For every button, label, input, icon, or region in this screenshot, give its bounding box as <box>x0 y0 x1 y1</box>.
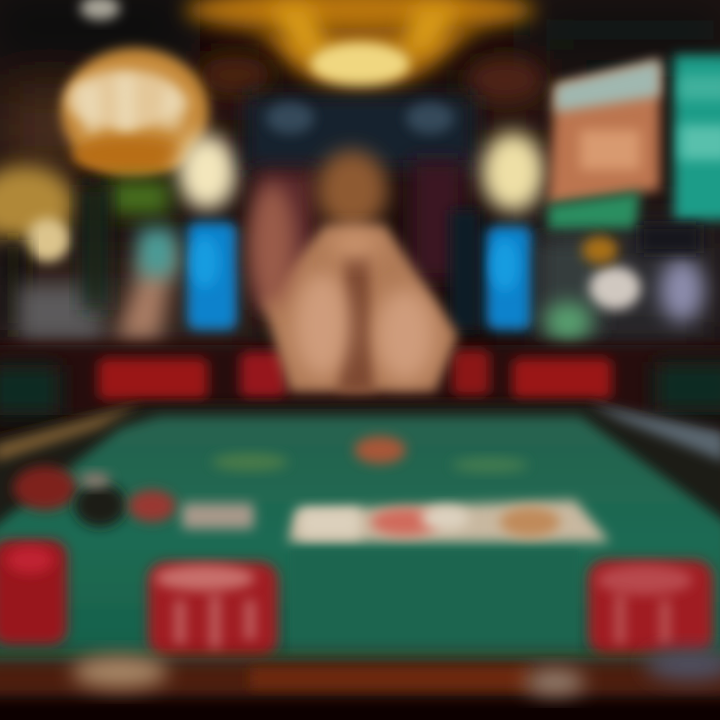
right lights and screens <box>481 55 720 230</box>
collar <box>330 229 380 261</box>
red seats <box>0 345 720 415</box>
front wooden rail <box>0 649 720 720</box>
left stack <box>0 540 67 645</box>
left chest <box>294 273 350 377</box>
right crowd <box>540 225 704 342</box>
cards row <box>288 500 610 542</box>
head <box>316 150 388 230</box>
ceiling chandelier <box>80 0 543 102</box>
left rail <box>0 404 140 462</box>
poker table <box>0 402 720 690</box>
right stack <box>588 560 713 655</box>
left crowd <box>0 185 176 340</box>
chandelier canopy <box>185 0 535 34</box>
right rail <box>590 404 720 462</box>
blue panels <box>187 222 532 330</box>
felt surface <box>0 416 720 670</box>
chandelier bowl <box>255 25 480 92</box>
table markings <box>212 436 528 473</box>
chandelier light <box>310 42 410 86</box>
torso <box>262 225 458 392</box>
middle stack <box>148 562 278 657</box>
red chip stacks <box>0 540 713 657</box>
center alcove <box>245 95 480 330</box>
right chest <box>375 289 435 381</box>
back wall <box>0 0 720 360</box>
ceiling spot <box>80 0 120 20</box>
chandelier ribs <box>270 5 460 60</box>
centre shade <box>338 250 374 392</box>
glow left <box>200 57 270 93</box>
table rim <box>0 402 720 690</box>
left lantern <box>0 48 237 262</box>
glow right <box>467 58 543 102</box>
central figure <box>248 150 458 392</box>
center felt panel <box>290 550 578 656</box>
left chips and cards <box>13 466 254 529</box>
raised arm <box>248 183 296 307</box>
